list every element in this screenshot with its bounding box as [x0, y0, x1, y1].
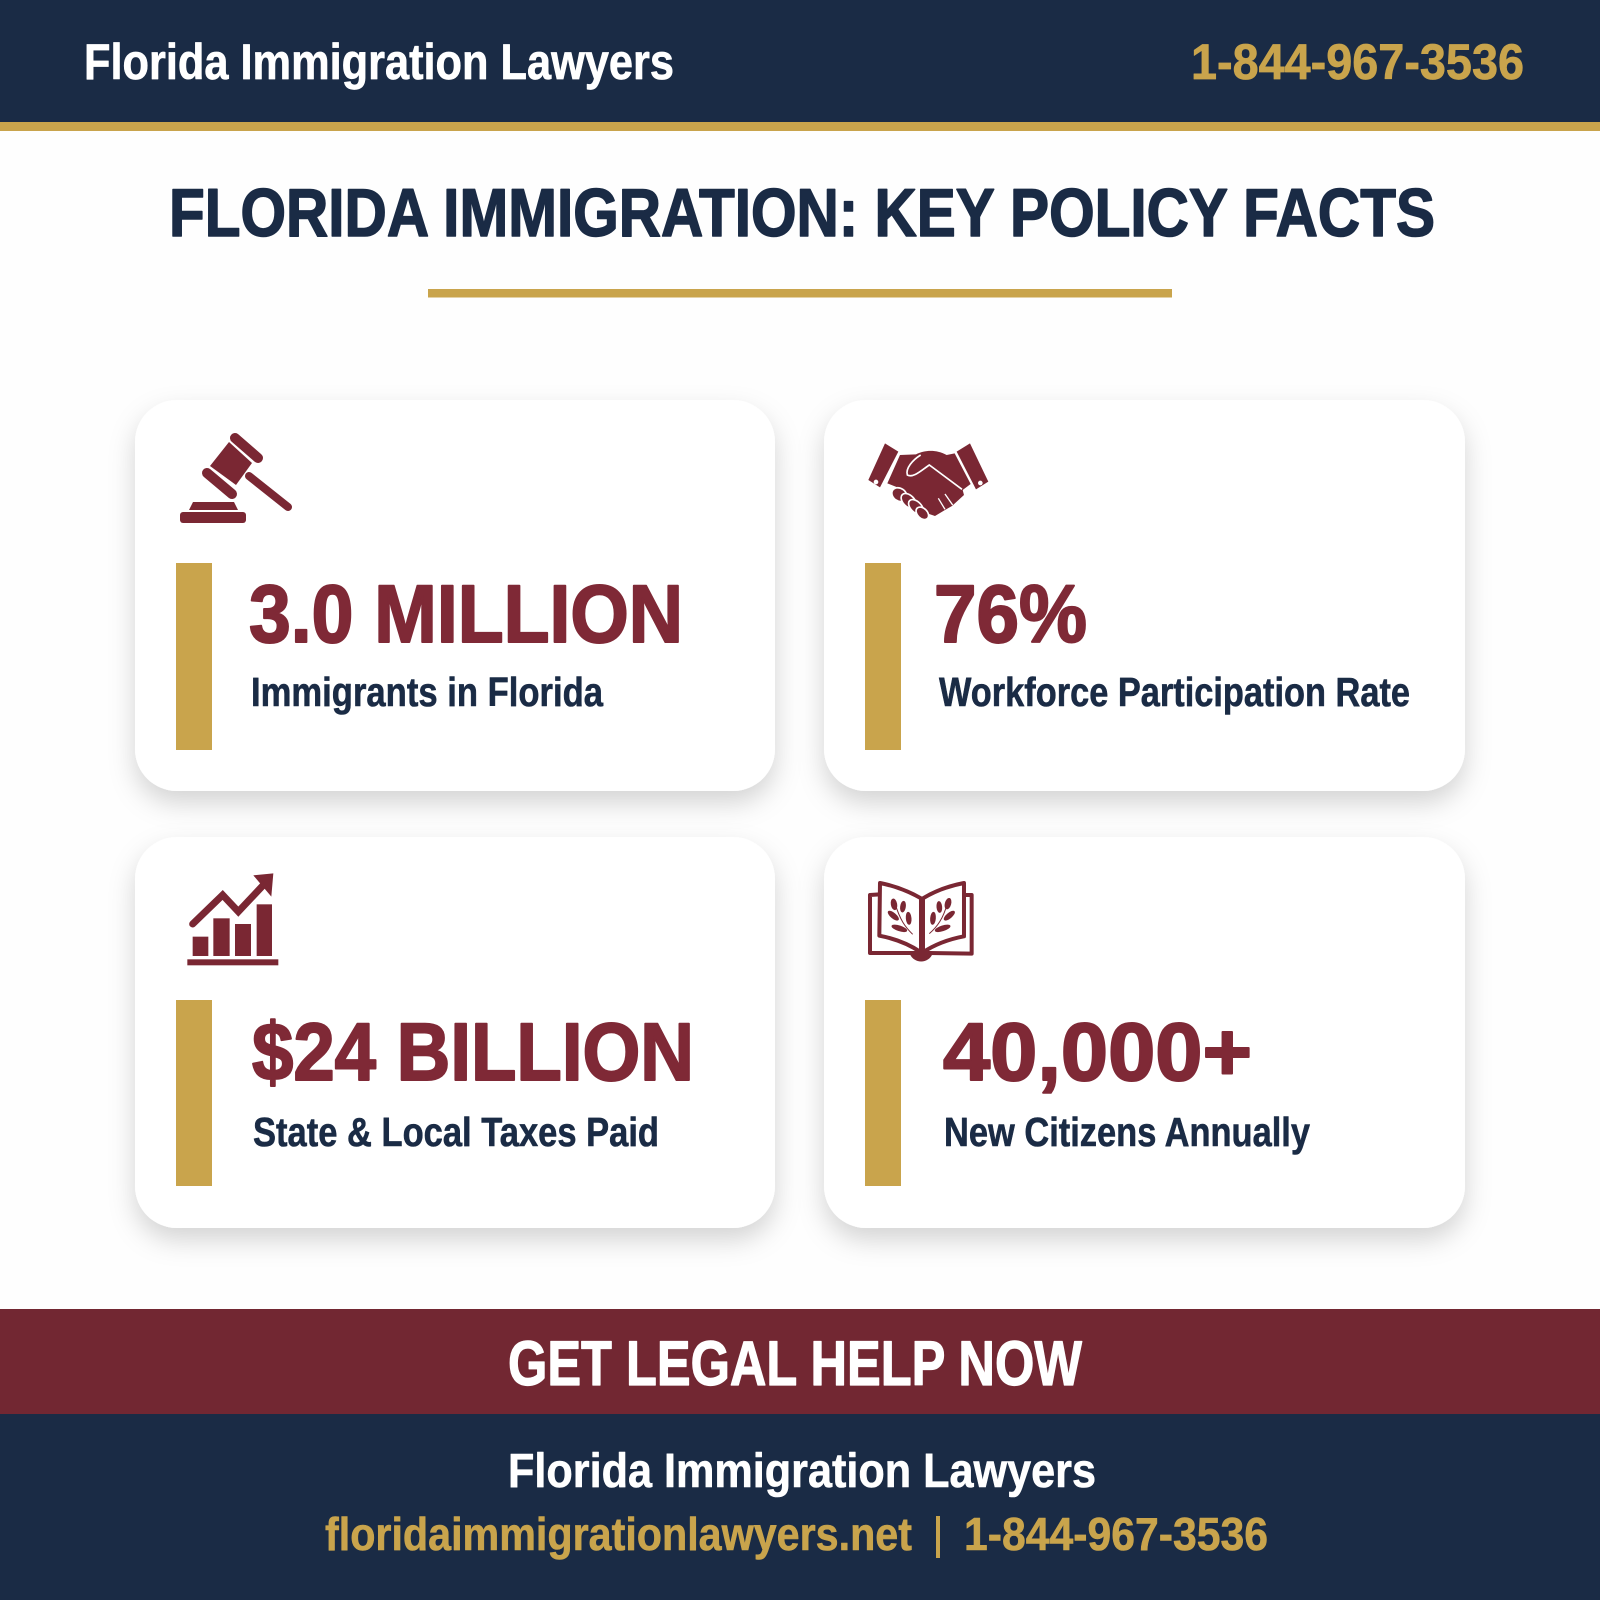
stat: $24 billion: $24 BILLION [252, 1007, 694, 1098]
label: immigrants in Florida: Immigrants in Florida [251, 669, 604, 715]
footer phone: 1-844-967-3536 [964, 1508, 1268, 1560]
panel: workforce [824, 400, 1465, 791]
panel: taxes [135, 837, 775, 1228]
panel: citizens [824, 837, 1465, 1228]
header band [0, 0, 1600, 131]
label: new citizens annually: New Citizens Annually [944, 1109, 1310, 1155]
icon: handshake [868, 443, 988, 522]
icon: gavel [180, 438, 288, 523]
icon: rising bar chart [187, 873, 278, 965]
stat: 76%: 76% [934, 569, 1087, 660]
icon: open book [870, 883, 972, 959]
title: FLORIDA IMMIGRATION: KEY POLICY FACTS [169, 175, 1435, 251]
footer band [0, 1414, 1600, 1600]
call to action text: GET LEGAL HELP NOW [508, 1329, 1082, 1399]
label: state and local taxes paid: State & Local Taxes Paid [253, 1109, 659, 1155]
label: workforce participation rate: Workforce Participation Rate [939, 669, 1410, 715]
stat: 40,000+: 40,000+ [943, 1007, 1252, 1098]
footer firm name: Florida Immigration Lawyers [508, 1445, 1096, 1498]
header firm name: Florida Immigration Lawyers [84, 34, 674, 90]
call to action band [0, 1309, 1600, 1414]
header phone: 1-844-967-3536 [1191, 34, 1524, 90]
footer website: floridaimmigrationlawyers.net [325, 1508, 912, 1560]
panel: immigrants [135, 400, 775, 791]
stat: 3.0 million: 3.0 MILLION [249, 569, 683, 660]
footer separator [936, 1516, 940, 1558]
